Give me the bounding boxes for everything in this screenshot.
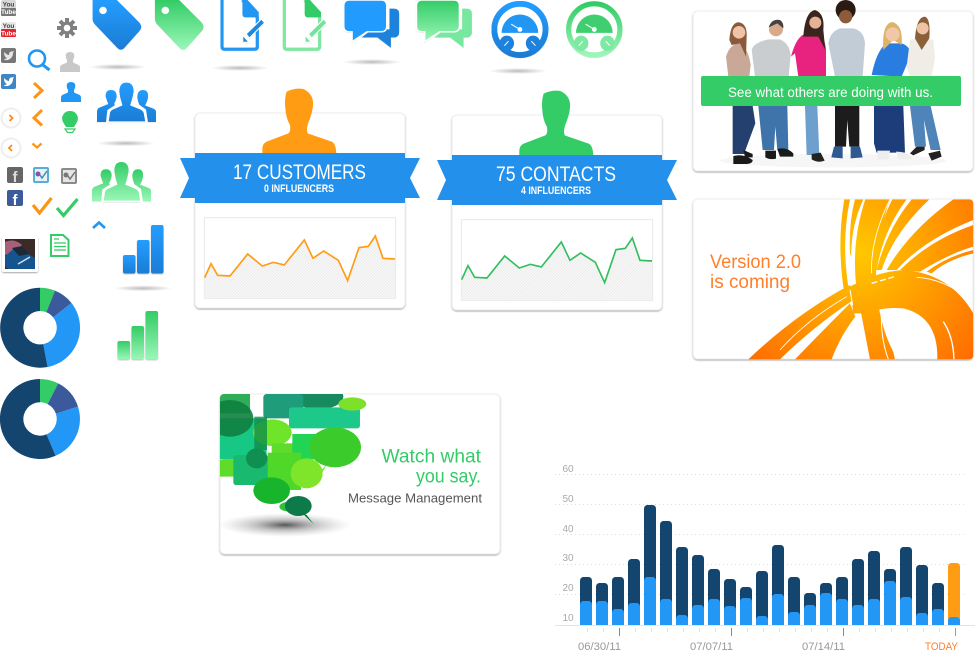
y axis labels: 10	[562, 613, 574, 624]
card	[195, 113, 405, 308]
icon: grey user	[60, 52, 80, 72]
icon: red YouTube: Tube	[1, 30, 16, 38]
icon: orange small chevron down	[32, 144, 42, 148]
icon: blue gauge	[494, 4, 546, 55]
card	[693, 199, 973, 359]
icon: green bars	[118, 311, 158, 360]
heading: 17 CUSTOMERS	[233, 161, 366, 184]
banner text: See what others are doing with us.	[728, 84, 933, 100]
panel: version announcement	[693, 199, 973, 359]
chart: stacked bars	[555, 464, 975, 651]
panel: contacts	[437, 91, 677, 310]
icon: grey YouTube: Tube	[1, 9, 16, 16]
icon: green people group	[92, 161, 151, 201]
icon: right arrow in circle	[0, 108, 22, 128]
y axis labels: 50	[562, 494, 574, 505]
y axis labels	[562, 464, 574, 624]
icon: blue edit document	[222, 0, 265, 49]
icon: red YouTube	[1, 22, 16, 38]
dark bars	[580, 505, 944, 632]
icon: grey Foursquare	[61, 168, 77, 184]
date labels	[578, 641, 959, 651]
baseline and ticks	[555, 626, 975, 636]
today bar	[948, 563, 960, 625]
y axis labels: 20	[562, 583, 574, 594]
icon: search	[29, 50, 50, 70]
ribbon	[437, 155, 677, 205]
y axis labels: 30	[562, 553, 574, 564]
text: watch what you say: you say.	[416, 467, 481, 488]
icon: blue user	[61, 82, 81, 102]
icon shadows	[89, 59, 547, 291]
icon: left arrow in circle	[0, 138, 22, 158]
icon: blue people group	[97, 82, 156, 122]
blue bars	[580, 577, 960, 625]
banner	[701, 76, 961, 106]
heading: 75 CONTACTS	[496, 163, 616, 186]
card	[452, 115, 662, 310]
y axis labels: 60	[562, 464, 574, 475]
chart: donut two	[0, 379, 80, 459]
photo: group of people	[720, 0, 947, 167]
line chart	[461, 220, 653, 300]
icon: light bulb	[62, 111, 78, 132]
icon: orange person	[262, 89, 336, 153]
thumbnail: car photo	[2, 236, 38, 272]
icon: orange chevron left	[34, 110, 42, 126]
icon: grey Facebook	[7, 167, 23, 186]
panel: message management	[207, 384, 500, 554]
chart: donut one	[0, 288, 80, 368]
icon: red YouTube: You	[3, 23, 14, 30]
icon: green check	[57, 199, 78, 216]
icon: green speech bubbles	[417, 0, 472, 48]
panel: customers	[180, 89, 420, 308]
card	[220, 394, 500, 554]
icon: orange check	[33, 198, 52, 213]
icon: blue bars	[123, 225, 164, 274]
icon: grey Facebook: f	[12, 169, 18, 186]
icon: green gauge	[569, 4, 620, 55]
icon: orange chevron right	[34, 83, 42, 98]
icon: blue speech bubbles	[344, 0, 399, 48]
text: version is coming	[710, 252, 801, 293]
icon: green edit document	[284, 0, 327, 49]
icon: blue tag	[93, 0, 141, 50]
y axis labels: 40	[562, 524, 574, 535]
gridlines	[555, 474, 964, 594]
ribbon	[180, 153, 420, 203]
panel: people promo	[693, 0, 973, 171]
artwork: orange swirls	[748, 199, 973, 359]
icon: blue Twitter	[1, 74, 16, 89]
icon: green tag	[155, 0, 204, 50]
icon: grey YouTube: You	[3, 2, 14, 8]
icon: blue Foursquare	[33, 167, 49, 183]
icon: blue chevron up	[93, 222, 105, 228]
text: version is coming: Version 2.0	[710, 252, 801, 273]
subheading: 0 INFLUENCERS	[264, 183, 334, 195]
icon: gear	[57, 18, 77, 38]
text: watch what you say	[382, 447, 482, 488]
icon: blue Facebook	[7, 190, 23, 209]
icon: green person	[519, 91, 593, 155]
text: version is coming: is coming	[710, 272, 790, 293]
icon: green document	[51, 235, 68, 256]
text: message management: Message Management	[348, 492, 483, 506]
icon: blue Facebook: f	[12, 192, 18, 209]
text: watch what you say: Watch what	[382, 447, 482, 468]
subheading: 4 INFLUENCERS	[521, 185, 591, 197]
line chart	[204, 218, 396, 298]
icon: grey YouTube	[1, 0, 16, 16]
card	[693, 11, 973, 171]
icon: grey Twitter	[1, 48, 16, 63]
artwork: green speech bubbles	[220, 394, 366, 536]
